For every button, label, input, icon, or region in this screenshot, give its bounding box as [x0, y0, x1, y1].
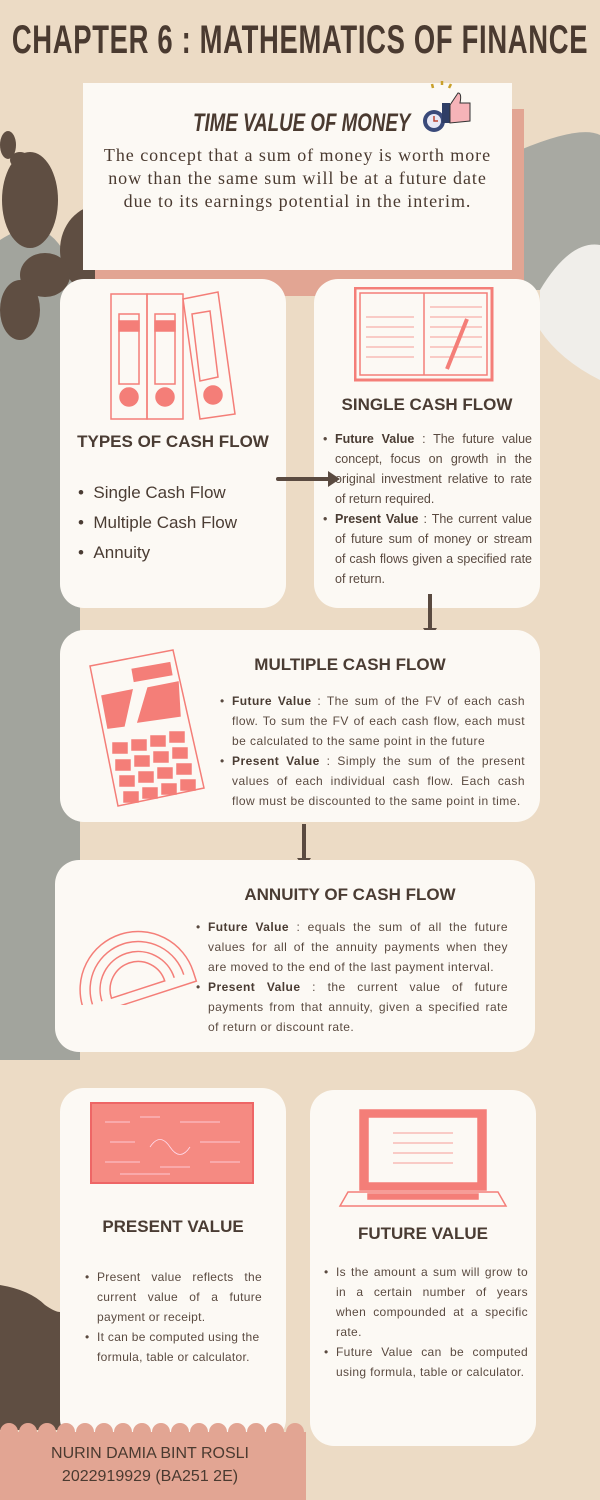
list [220, 694, 525, 808]
icon: protractor [79, 930, 198, 1005]
list: Present Value : the current value of future payments from that annuity, given a specified rate of return or discount rate. [208, 980, 508, 1034]
icon: chalkboard [90, 1102, 254, 1184]
list: It can be computed using the formula, table or calculator. [97, 1330, 260, 1364]
icon: laptop [338, 1109, 508, 1207]
panel: annuity [55, 860, 535, 1052]
list: Present Value : Simply the sum of the present values of each individual cash flow. Each cash flow must be discounted to the same point in time. [232, 754, 525, 808]
panel: single cash flow [314, 279, 540, 608]
list [78, 483, 237, 562]
panel: multiple cash flow [60, 630, 540, 822]
heading: ANNUITY OF CASH FLOW [244, 885, 456, 904]
text: definition: due to its earnings potential in the interim. [124, 191, 471, 211]
list [196, 920, 508, 1034]
list [324, 1265, 528, 1379]
text: definition: The concept that a sum of money is worth more [104, 145, 491, 165]
arrow: down 1 [423, 594, 437, 630]
icon: calculator [89, 649, 205, 807]
list: • Annuity [78, 543, 150, 562]
list: Present value reflects the current value of a future payment or receipt. [97, 1270, 262, 1324]
footer: author: NURIN DAMIA BINT ROSLI [51, 1445, 249, 1462]
heading: time value of money: TIME VALUE OF MONEY [193, 109, 410, 137]
heading: FUTURE VALUE [358, 1224, 488, 1243]
list: • Single Cash Flow [78, 483, 226, 502]
text: definition [104, 145, 491, 211]
panel: present value [60, 1088, 286, 1443]
icon: clock thumbs up [423, 81, 470, 132]
footer: author: 2022919929 (BA251 2E) [62, 1468, 238, 1485]
list: Present Value : The current value of future sum of money or stream of cash flows given a specified rate of return. [335, 512, 532, 586]
arrow: right [276, 471, 340, 487]
icon: notebook [354, 287, 494, 382]
footer: author [0, 1423, 306, 1500]
heading: SINGLE CASH FLOW [342, 395, 512, 414]
panel: time value of money [83, 81, 524, 296]
text: definition: now than the same sum will be at a future date [108, 168, 487, 188]
list: • Multiple Cash Flow [78, 513, 237, 532]
panel: future value [310, 1090, 536, 1446]
heading: PRESENT VALUE [102, 1217, 244, 1236]
list: Future Value can be computed using formula, table or calculator. [336, 1345, 528, 1379]
panel: types of cash flow [60, 279, 286, 608]
title: CHAPTER 6 : MATHEMATICS OF FINANCE [12, 18, 588, 62]
list [324, 432, 532, 586]
list: Future Value : equals the sum of all the future values for all of the annuity payments when they are moved to the end of the last payment interval. [208, 920, 508, 974]
arrow: down 2 [297, 824, 311, 860]
heading: TYPES OF CASH FLOW [77, 432, 269, 451]
list [86, 1270, 262, 1364]
icon: binders [110, 291, 236, 420]
heading: MULTIPLE CASH FLOW [254, 655, 446, 674]
list: Future Value : The sum of the FV of each cash flow. To sum the FV of each cash flow, each must be calculated to the same point in the future [232, 694, 525, 748]
list: Future Value : The future value concept, focus on growth in the original investment relative to rate of return required. [335, 432, 532, 506]
list: Is the amount a sum will grow to in a certain number of years when compounded at a specific rate. [336, 1265, 528, 1339]
